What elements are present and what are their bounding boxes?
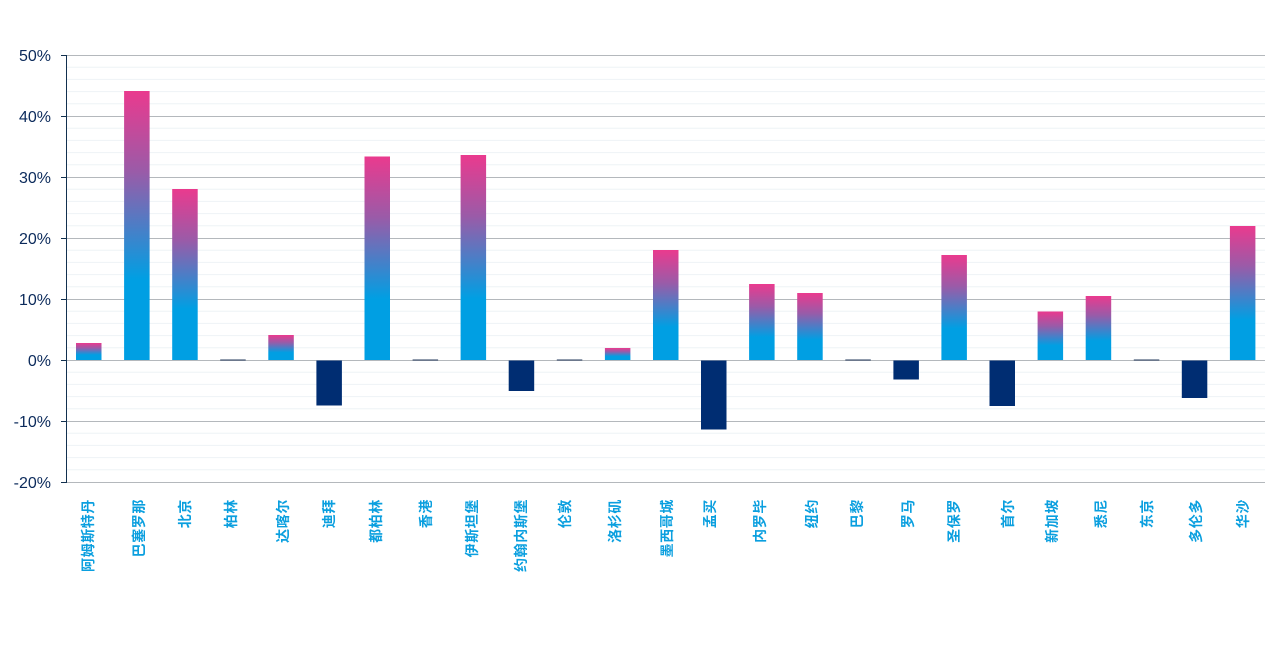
y axis (14, 48, 67, 492)
x axis labels: 柏林 (223, 499, 239, 528)
x axis labels: 东京 (1139, 499, 1155, 528)
x axis labels: 达喀尔 (275, 499, 291, 543)
bars (76, 91, 1255, 430)
y axis: 0% (28, 353, 51, 370)
x axis labels: 北京 (177, 499, 193, 528)
x axis labels: 孟买 (702, 499, 718, 528)
y axis: -10% (14, 414, 51, 431)
y axis: 20% (19, 231, 51, 248)
x axis labels: 墨西哥城 (659, 499, 675, 557)
x axis labels: 巴黎 (849, 499, 865, 528)
y axis: 50% (19, 48, 51, 65)
x axis labels: 纽约 (804, 499, 820, 528)
y axis: 10% (19, 292, 51, 309)
x axis labels: 都柏林 (368, 499, 384, 543)
x axis labels: 新加坡 (1044, 499, 1060, 543)
x axis labels: 首尔 (1000, 499, 1016, 528)
x axis labels: 巴塞罗那 (131, 499, 147, 557)
x axis labels: 悉尼 (1093, 499, 1109, 528)
x axis labels: 阿姆斯特丹 (80, 499, 96, 572)
x axis labels: 圣保罗 (946, 499, 962, 543)
x axis labels (80, 499, 1251, 572)
y axis: 40% (19, 109, 51, 126)
x axis labels: 罗马 (900, 499, 916, 528)
x axis labels: 伊斯坦堡 (464, 499, 480, 557)
x axis labels: 内罗毕 (752, 499, 768, 543)
x axis labels: 多伦多 (1188, 499, 1204, 543)
y axis: 30% (19, 170, 51, 187)
x axis labels: 洛杉矶 (607, 499, 623, 543)
x axis labels: 伦敦 (557, 499, 573, 528)
x axis labels: 华沙 (1235, 499, 1251, 528)
x axis labels: 香港 (418, 499, 434, 528)
x axis labels: 迪拜 (321, 499, 337, 528)
y axis: -20% (14, 475, 51, 492)
x axis labels: 约翰内斯堡 (513, 499, 529, 572)
